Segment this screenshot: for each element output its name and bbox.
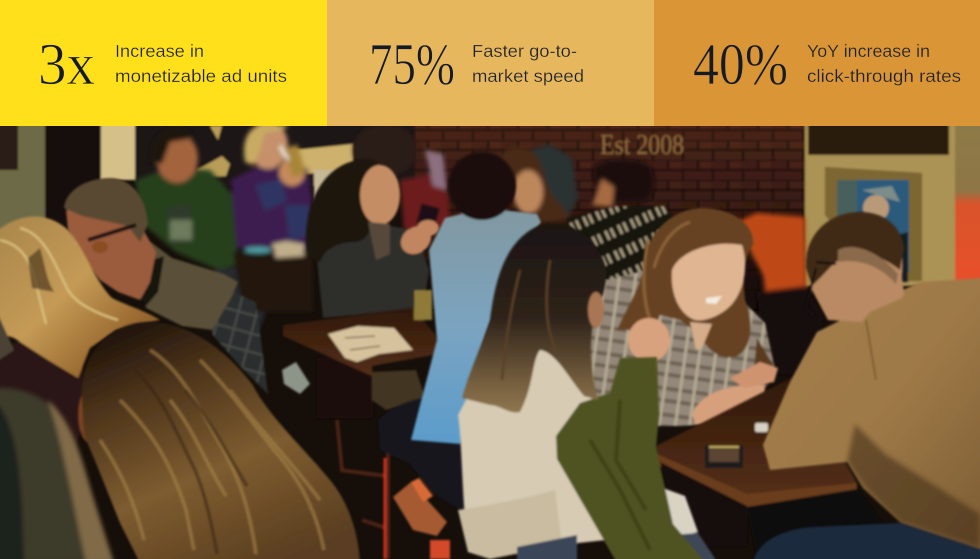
stat label: monetizable ad units: monetizable ad units (115, 66, 287, 86)
table with napkin (282, 290, 450, 418)
person: man in green jacket (136, 128, 265, 339)
background: walls and decor (0, 122, 980, 316)
text on brick wall: Est 2008 (600, 130, 684, 161)
panel: stat 3x (0, 0, 327, 126)
person: man with undercut in tan sweater (753, 212, 980, 559)
green jacket (556, 357, 706, 559)
jeans (517, 535, 577, 559)
stat label: go-to-market speed: market speed (472, 66, 584, 86)
stool and legs (337, 392, 464, 559)
panel: stat 40% (654, 0, 980, 126)
stat label: click-through rates (807, 41, 961, 86)
person: woman behind at brick wall (497, 144, 578, 223)
back table with items (233, 241, 313, 312)
photo: people at pub tables (0, 121, 980, 559)
person: behind in red (400, 174, 450, 232)
white bag (663, 488, 698, 538)
stat label: click-through rates: click-through rates (807, 66, 961, 86)
striped sweater (566, 204, 674, 281)
picture on the wall (825, 167, 922, 282)
stat label: go-to-market speed: Faster go-to- (472, 41, 577, 61)
person: blonde woman in purple sweater (231, 121, 317, 250)
jeans (753, 523, 980, 559)
background people (134, 126, 809, 330)
face (672, 244, 745, 320)
stat value: 3x: 3x (38, 31, 95, 97)
hair (617, 208, 753, 357)
plaid shirt (580, 268, 775, 426)
stat label: monetizable ad units (115, 41, 287, 86)
table with phone (648, 375, 887, 559)
head (808, 214, 904, 322)
dark long hair (462, 223, 606, 413)
glasses (806, 262, 836, 316)
cream sweater (458, 345, 606, 559)
sweater (763, 278, 980, 550)
person: blurred head bottom left (0, 388, 114, 559)
sweater shadow (847, 424, 980, 548)
phone on table (705, 445, 743, 468)
person: woman with dark hair, cream sweater and green jacket (458, 223, 718, 559)
person: woman with long brown hair, foreground (78, 322, 360, 559)
stat label: go-to-market speed (472, 41, 584, 86)
hands (692, 385, 766, 425)
person: woman with curly hair and phone (306, 159, 439, 318)
stat value: 40%: 40% (693, 31, 788, 97)
person: man in blue denim shirt (411, 152, 541, 444)
person: smiling woman in plaid shirt (580, 208, 778, 426)
fist (628, 318, 670, 362)
stat label: monetizable ad units: Increase in (115, 41, 204, 61)
person: woman with blonde hair (0, 215, 160, 444)
stat value: 75%: 75% (369, 31, 455, 97)
red clothing pile (739, 210, 810, 296)
person: man behind in striped sweater (592, 159, 655, 207)
hair (806, 212, 904, 286)
glasses (88, 225, 136, 240)
panel: stat 75% (327, 0, 654, 126)
stat label: click-through rates: YoY increase in (807, 41, 930, 61)
person: man with glasses in vest (64, 178, 268, 394)
